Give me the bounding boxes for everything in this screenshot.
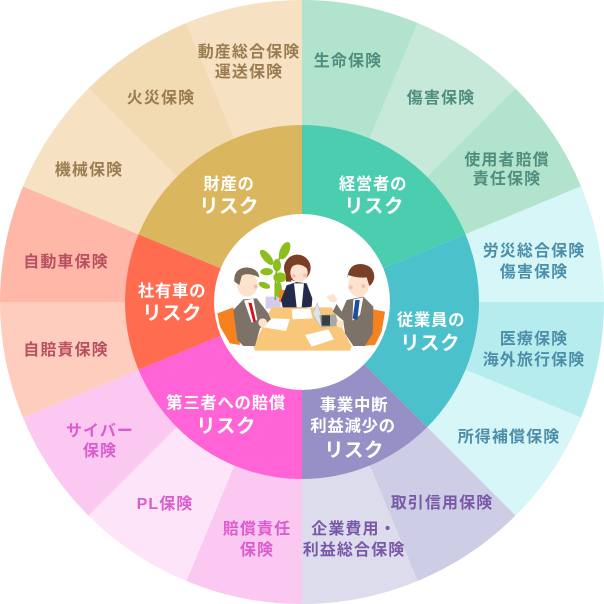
man on the right (327, 264, 385, 346)
label: executive risk (339, 174, 407, 218)
pink group labels: 賠償責任 (223, 520, 291, 538)
brown group labels: 運送保険 (215, 63, 283, 81)
blue group labels: 労災総合保険 (483, 242, 585, 260)
green group labels: 生命保険 (314, 52, 382, 70)
table (253, 307, 352, 351)
laptop (313, 303, 337, 327)
man on the left (217, 267, 271, 346)
blue group labels: 傷害保険 (500, 262, 568, 281)
label: company car risk: リスク (142, 302, 202, 324)
brown group labels: 機械保険 (55, 160, 123, 179)
label: business interruption risk: 利益減少の (310, 416, 396, 436)
pink group labels (66, 422, 291, 559)
label: business interruption risk: リスク (324, 440, 384, 462)
risk labels (138, 174, 465, 462)
label: business interruption risk (310, 396, 396, 462)
green group labels: 使用者賠償 (464, 151, 550, 169)
brown group labels: 動産総合保険 (198, 43, 300, 61)
label: third-party liability risk (166, 394, 286, 438)
brown group labels (55, 43, 300, 179)
green group labels: 傷害保険 (407, 88, 475, 107)
purple group labels (303, 493, 493, 559)
centre white circle (214, 214, 390, 390)
pink group labels: サイバー (66, 422, 134, 440)
middle ring: risk categories (125, 125, 479, 479)
woman (279, 255, 312, 310)
papers (263, 308, 334, 347)
label: executive risk: 経営者の (339, 174, 407, 194)
red group labels (23, 252, 109, 359)
blue group labels (458, 242, 585, 446)
purple group labels: 企業費用・ (311, 519, 397, 538)
label: property risk: リスク (199, 196, 259, 218)
label: employee risk: 従業員の (397, 312, 465, 330)
label: third-party liability risk: 第三者への賠償 (166, 394, 286, 412)
pink group labels: 保険 (83, 442, 117, 460)
label: property risk (199, 174, 259, 218)
label: employee risk: リスク (400, 332, 460, 354)
label: employee risk (397, 312, 465, 354)
red group labels: 自賠責保険 (23, 340, 109, 359)
green group labels: 責任保険 (473, 170, 541, 188)
green group labels (314, 52, 550, 188)
insurance labels (23, 43, 585, 559)
blue group labels: 医療保険 (500, 330, 568, 348)
purple group labels: 取引信用保険 (391, 493, 493, 512)
label: third-party liability risk: リスク (196, 416, 256, 438)
label: executive risk: リスク (344, 196, 404, 218)
plant (258, 240, 293, 309)
blue group labels: 海外旅行保険 (483, 350, 585, 369)
red group labels: 自動車保険 (23, 252, 109, 271)
pink group labels: 保険 (240, 541, 274, 559)
label: property risk: 財産の (203, 174, 255, 194)
brown group labels: 火災保険 (127, 89, 195, 107)
label: company car risk (138, 282, 206, 324)
label: company car risk: 社有車の (138, 282, 206, 300)
illustration: business meeting (217, 240, 385, 351)
label: business interruption risk: 事業中断 (320, 396, 388, 414)
blue group labels: 所得補償保険 (458, 428, 560, 446)
purple group labels: 利益総合保険 (303, 540, 405, 559)
pink group labels: PL保険 (137, 495, 193, 513)
